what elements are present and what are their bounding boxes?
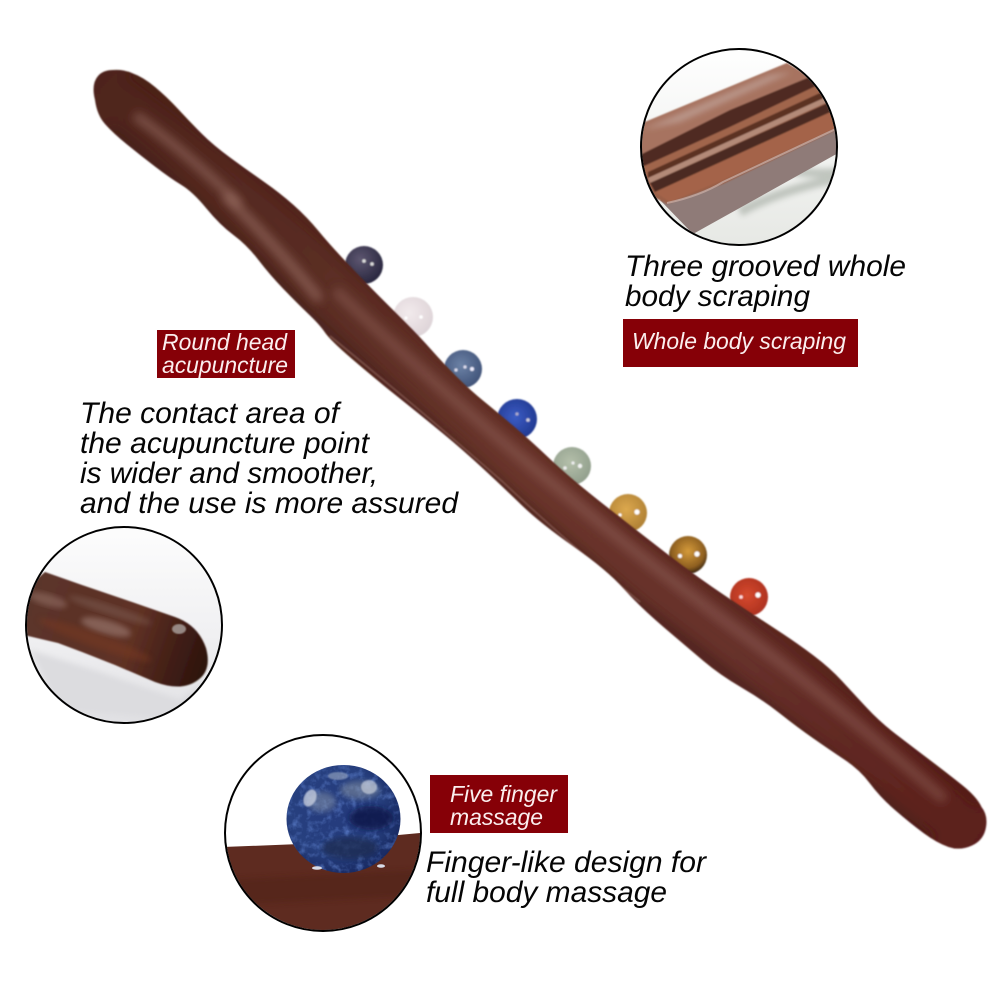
text: contact area description: is wider and smoother, <box>80 457 378 490</box>
grey underside <box>660 125 840 234</box>
bead: blue grey <box>444 350 482 388</box>
bead: yellow jasper <box>609 494 647 532</box>
wood body <box>640 63 840 204</box>
text: three grooved description <box>625 250 906 313</box>
bead: lapis <box>497 399 537 439</box>
shadows below stick <box>740 170 840 212</box>
heading label: five finger massage: Five finger <box>450 781 558 807</box>
ridge 2 <box>646 89 811 165</box>
lapis sphere <box>286 765 400 873</box>
lower edge groove <box>330 336 640 602</box>
ridge 4 <box>655 110 840 202</box>
upper dark band <box>130 72 980 800</box>
sheen highlights <box>135 115 240 205</box>
heading label: whole body scraping: Whole body scraping <box>632 328 846 354</box>
heading label: round head acupuncture: Round head <box>162 329 288 355</box>
text: contact area description: and the use is more assured <box>80 487 459 520</box>
front edge highlight <box>667 127 840 203</box>
panel: round head close-up <box>24 525 224 725</box>
heading label: five finger massage: massage <box>450 804 543 830</box>
panel: lapis bead close-up <box>224 734 424 934</box>
top ridge <box>640 63 812 155</box>
text: finger-like description: full body massage <box>426 876 667 909</box>
heading label: round head acupuncture: acupuncture <box>162 352 288 378</box>
text: finger-like description <box>426 846 707 909</box>
stick shadow <box>33 652 184 714</box>
thin groove 2 <box>648 92 826 178</box>
bead: red jasper <box>730 578 768 616</box>
bead: tiger eye <box>669 536 707 574</box>
lower dark band <box>110 130 930 840</box>
beads row <box>345 246 768 616</box>
text: contact area description <box>80 397 459 520</box>
sheen <box>30 590 68 610</box>
tip glint <box>172 624 186 634</box>
panel: three grooves close-up <box>640 48 840 248</box>
text: finger-like description: Finger-like design for <box>426 846 707 879</box>
base glints <box>312 866 322 870</box>
text: contact area description: the acupuncture point <box>80 427 371 460</box>
wood base <box>224 833 424 934</box>
bead: dark purple <box>345 246 383 284</box>
groove dark 1 <box>640 76 816 168</box>
heading label: round head acupuncture <box>157 329 295 378</box>
heading label: whole body scraping <box>623 319 858 367</box>
bead: jade green <box>553 447 591 485</box>
text: three grooved description: body scraping <box>625 280 810 313</box>
text: contact area description: The contact area of <box>80 397 342 430</box>
heading label: five finger massage <box>430 775 568 833</box>
groove dark 3 <box>650 102 835 192</box>
bead: rose quartz <box>393 297 433 337</box>
rounded head body <box>24 572 208 687</box>
text: three grooved description: Three grooved whole <box>625 250 906 283</box>
wooden massage stick <box>80 60 1000 860</box>
